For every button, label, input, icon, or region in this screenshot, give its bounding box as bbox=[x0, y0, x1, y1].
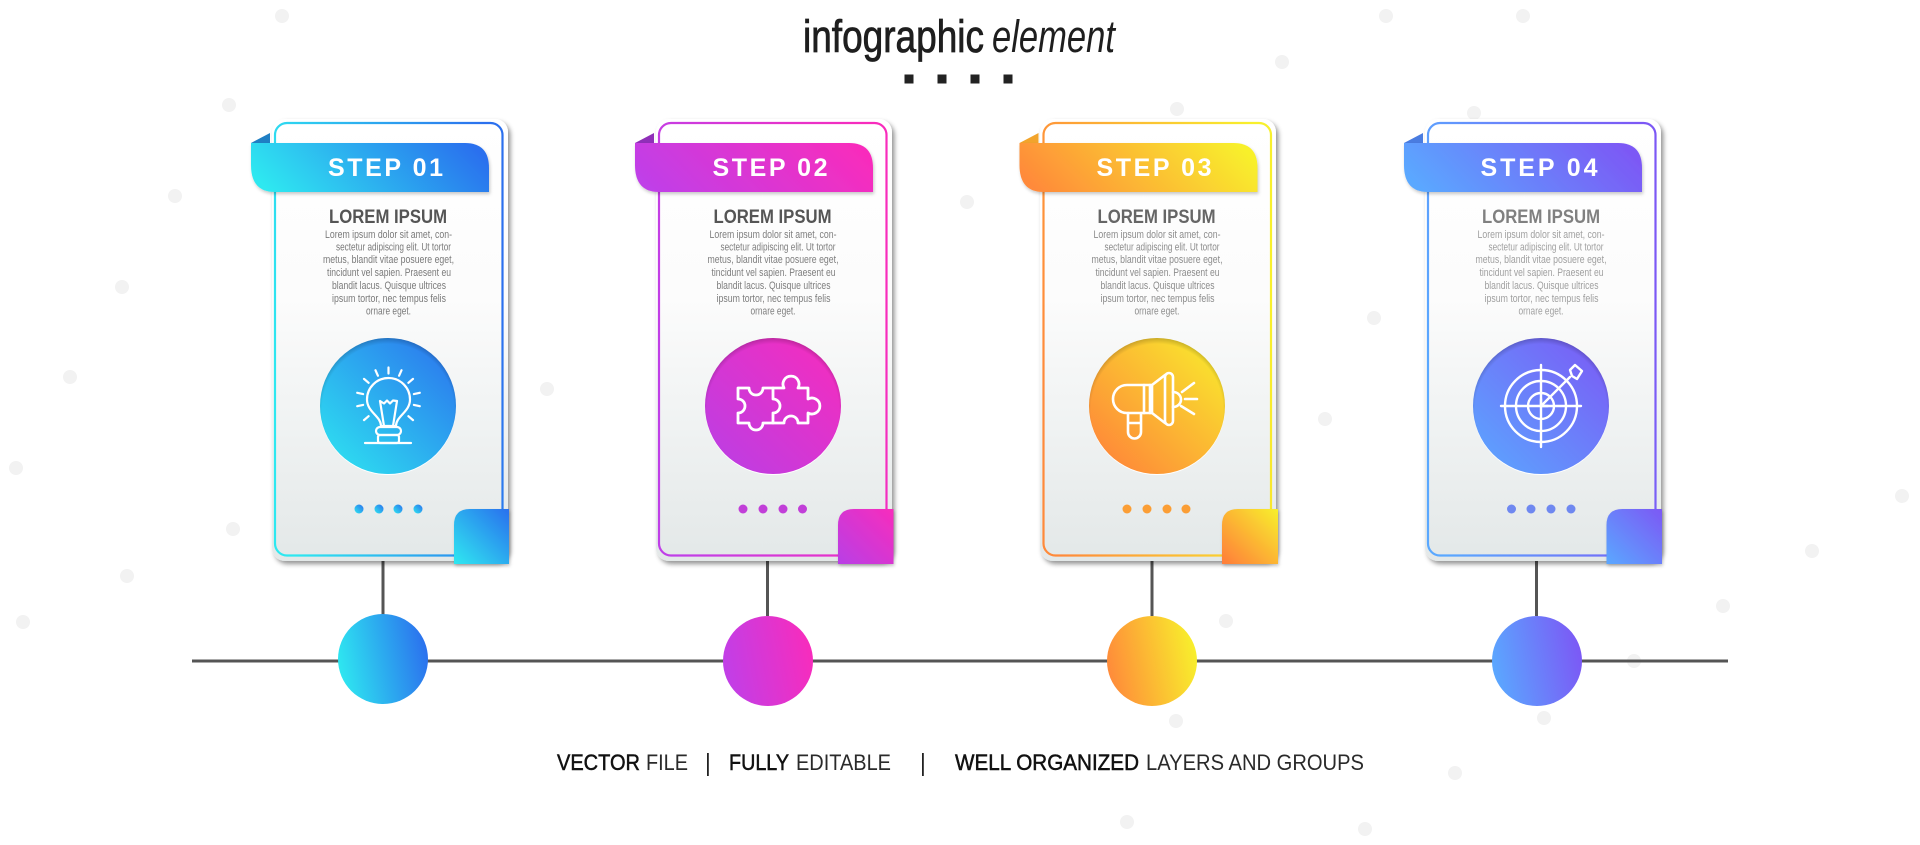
step 3 connector bbox=[1150, 560, 1154, 616]
icon circle bbox=[320, 338, 456, 475]
card background bbox=[1040, 119, 1276, 561]
timeline node 2 bbox=[723, 616, 813, 706]
heading: LOREM IPSUM bbox=[329, 207, 447, 228]
corner tab bbox=[1606, 509, 1662, 564]
card outline bbox=[275, 123, 502, 556]
body text: ornare eget. bbox=[366, 306, 411, 318]
card outline bbox=[1428, 123, 1656, 556]
title: element bbox=[992, 11, 1117, 62]
pagination dots bbox=[1507, 504, 1576, 514]
ribbon bbox=[251, 143, 489, 192]
icon: puzzle pieces bbox=[738, 376, 820, 430]
card background bbox=[1425, 119, 1661, 561]
ribbon fold bbox=[635, 133, 654, 144]
panel: step 3 bbox=[1020, 119, 1278, 564]
ribbon fold bbox=[1404, 133, 1423, 144]
step 4 connector bbox=[1535, 560, 1538, 616]
icon: target with arrow bbox=[1501, 365, 1582, 447]
body text: ipsum tortor, nec tempus felis bbox=[1100, 293, 1215, 305]
corner tab bbox=[454, 509, 509, 564]
body text: ornare eget. bbox=[1134, 306, 1180, 318]
step label: STEP 02 bbox=[712, 154, 828, 182]
icon circle bbox=[705, 338, 841, 475]
step label: STEP 01 bbox=[328, 154, 443, 182]
ribbon bbox=[1020, 143, 1258, 192]
body text: Lorem ipsum dolor sit amet, con- bbox=[1478, 229, 1605, 241]
pagination dots bbox=[738, 504, 807, 514]
step label: STEP 04 bbox=[1480, 154, 1598, 182]
body text: metus, blandit vitae posuere eget, bbox=[708, 254, 838, 266]
body text: blandit lacus. Quisque ultrices bbox=[716, 280, 831, 292]
body text bbox=[323, 229, 454, 318]
ribbon fold bbox=[1020, 133, 1038, 144]
body text: tincidunt vel sapien. Praesent eu bbox=[712, 267, 836, 279]
body text bbox=[1092, 229, 1222, 318]
heading: LOREM IPSUM bbox=[714, 207, 832, 228]
card outline bbox=[1044, 123, 1271, 556]
icon circle bbox=[1473, 338, 1609, 475]
corner tab bbox=[1222, 509, 1278, 564]
step 2 connector bbox=[766, 560, 769, 616]
body text: blandit lacus. Quisque ultrices bbox=[1484, 280, 1599, 292]
body text bbox=[1476, 229, 1606, 318]
body text: metus, blandit vitae posuere eget, bbox=[1092, 254, 1222, 266]
body text: Lorem ipsum dolor sit amet, con- bbox=[710, 229, 837, 241]
body text: sectetur adipiscing elit. Ut tortor bbox=[720, 242, 836, 254]
body text: sectetur adipiscing elit. Ut tortor bbox=[336, 242, 451, 254]
body text: ipsum tortor, nec tempus felis bbox=[332, 293, 446, 305]
timeline node 4 bbox=[1492, 616, 1582, 706]
body text: ipsum tortor, nec tempus felis bbox=[1484, 293, 1599, 305]
timeline line bbox=[192, 660, 1728, 662]
heading: LOREM IPSUM bbox=[1482, 207, 1600, 228]
body text: ornare eget. bbox=[1518, 306, 1564, 318]
footer tagline: EDITABLE bbox=[796, 750, 891, 775]
panel: step 4 bbox=[1404, 119, 1662, 564]
body text: tincidunt vel sapien. Praesent eu bbox=[1096, 267, 1220, 279]
body text: sectetur adipiscing elit. Ut tortor bbox=[1488, 242, 1604, 254]
step label: STEP 03 bbox=[1096, 154, 1212, 182]
footer tagline bbox=[557, 750, 1364, 776]
footer tagline: WELL ORGANIZED bbox=[955, 750, 1139, 775]
footer tagline: VECTOR bbox=[557, 750, 640, 775]
card background bbox=[272, 119, 508, 561]
title: infographic bbox=[803, 11, 984, 62]
pagination dots bbox=[1122, 504, 1190, 514]
body text: tincidunt vel sapien. Praesent eu bbox=[327, 267, 451, 279]
body text: ipsum tortor, nec tempus felis bbox=[716, 293, 831, 305]
body text: metus, blandit vitae posuere eget, bbox=[1476, 254, 1606, 266]
body text: Lorem ipsum dolor sit amet, con- bbox=[325, 229, 452, 241]
body text: blandit lacus. Quisque ultrices bbox=[332, 280, 446, 292]
panel: step 1 bbox=[251, 119, 509, 564]
corner tab bbox=[838, 509, 894, 564]
icon: megaphone bbox=[1113, 373, 1197, 438]
timeline node 3 bbox=[1107, 616, 1197, 706]
panel: step 2 bbox=[635, 119, 894, 564]
body text: metus, blandit vitae posuere eget, bbox=[323, 254, 454, 266]
body text: blandit lacus. Quisque ultrices bbox=[1100, 280, 1215, 292]
footer tagline: FILE bbox=[646, 750, 688, 775]
card outline bbox=[659, 123, 886, 556]
footer tagline: LAYERS AND GROUPS bbox=[1146, 750, 1364, 775]
footer tagline: FULLY bbox=[729, 750, 789, 775]
title squares bbox=[904, 74, 1012, 84]
ribbon fold bbox=[251, 133, 270, 144]
body text: sectetur adipiscing elit. Ut tortor bbox=[1104, 242, 1220, 254]
icon: light bulb bbox=[357, 368, 420, 443]
heading: LOREM IPSUM bbox=[1098, 207, 1216, 228]
card background bbox=[656, 119, 892, 561]
body text bbox=[708, 229, 838, 318]
step 1 connector bbox=[382, 560, 384, 616]
timeline node 1 bbox=[338, 614, 428, 704]
body text: Lorem ipsum dolor sit amet, con- bbox=[1094, 229, 1221, 241]
pagination dots bbox=[354, 504, 422, 514]
body text: ornare eget. bbox=[750, 306, 796, 318]
icon circle bbox=[1089, 338, 1225, 475]
ribbon bbox=[1404, 143, 1642, 192]
ribbon bbox=[635, 143, 873, 192]
body text: tincidunt vel sapien. Praesent eu bbox=[1480, 267, 1604, 279]
